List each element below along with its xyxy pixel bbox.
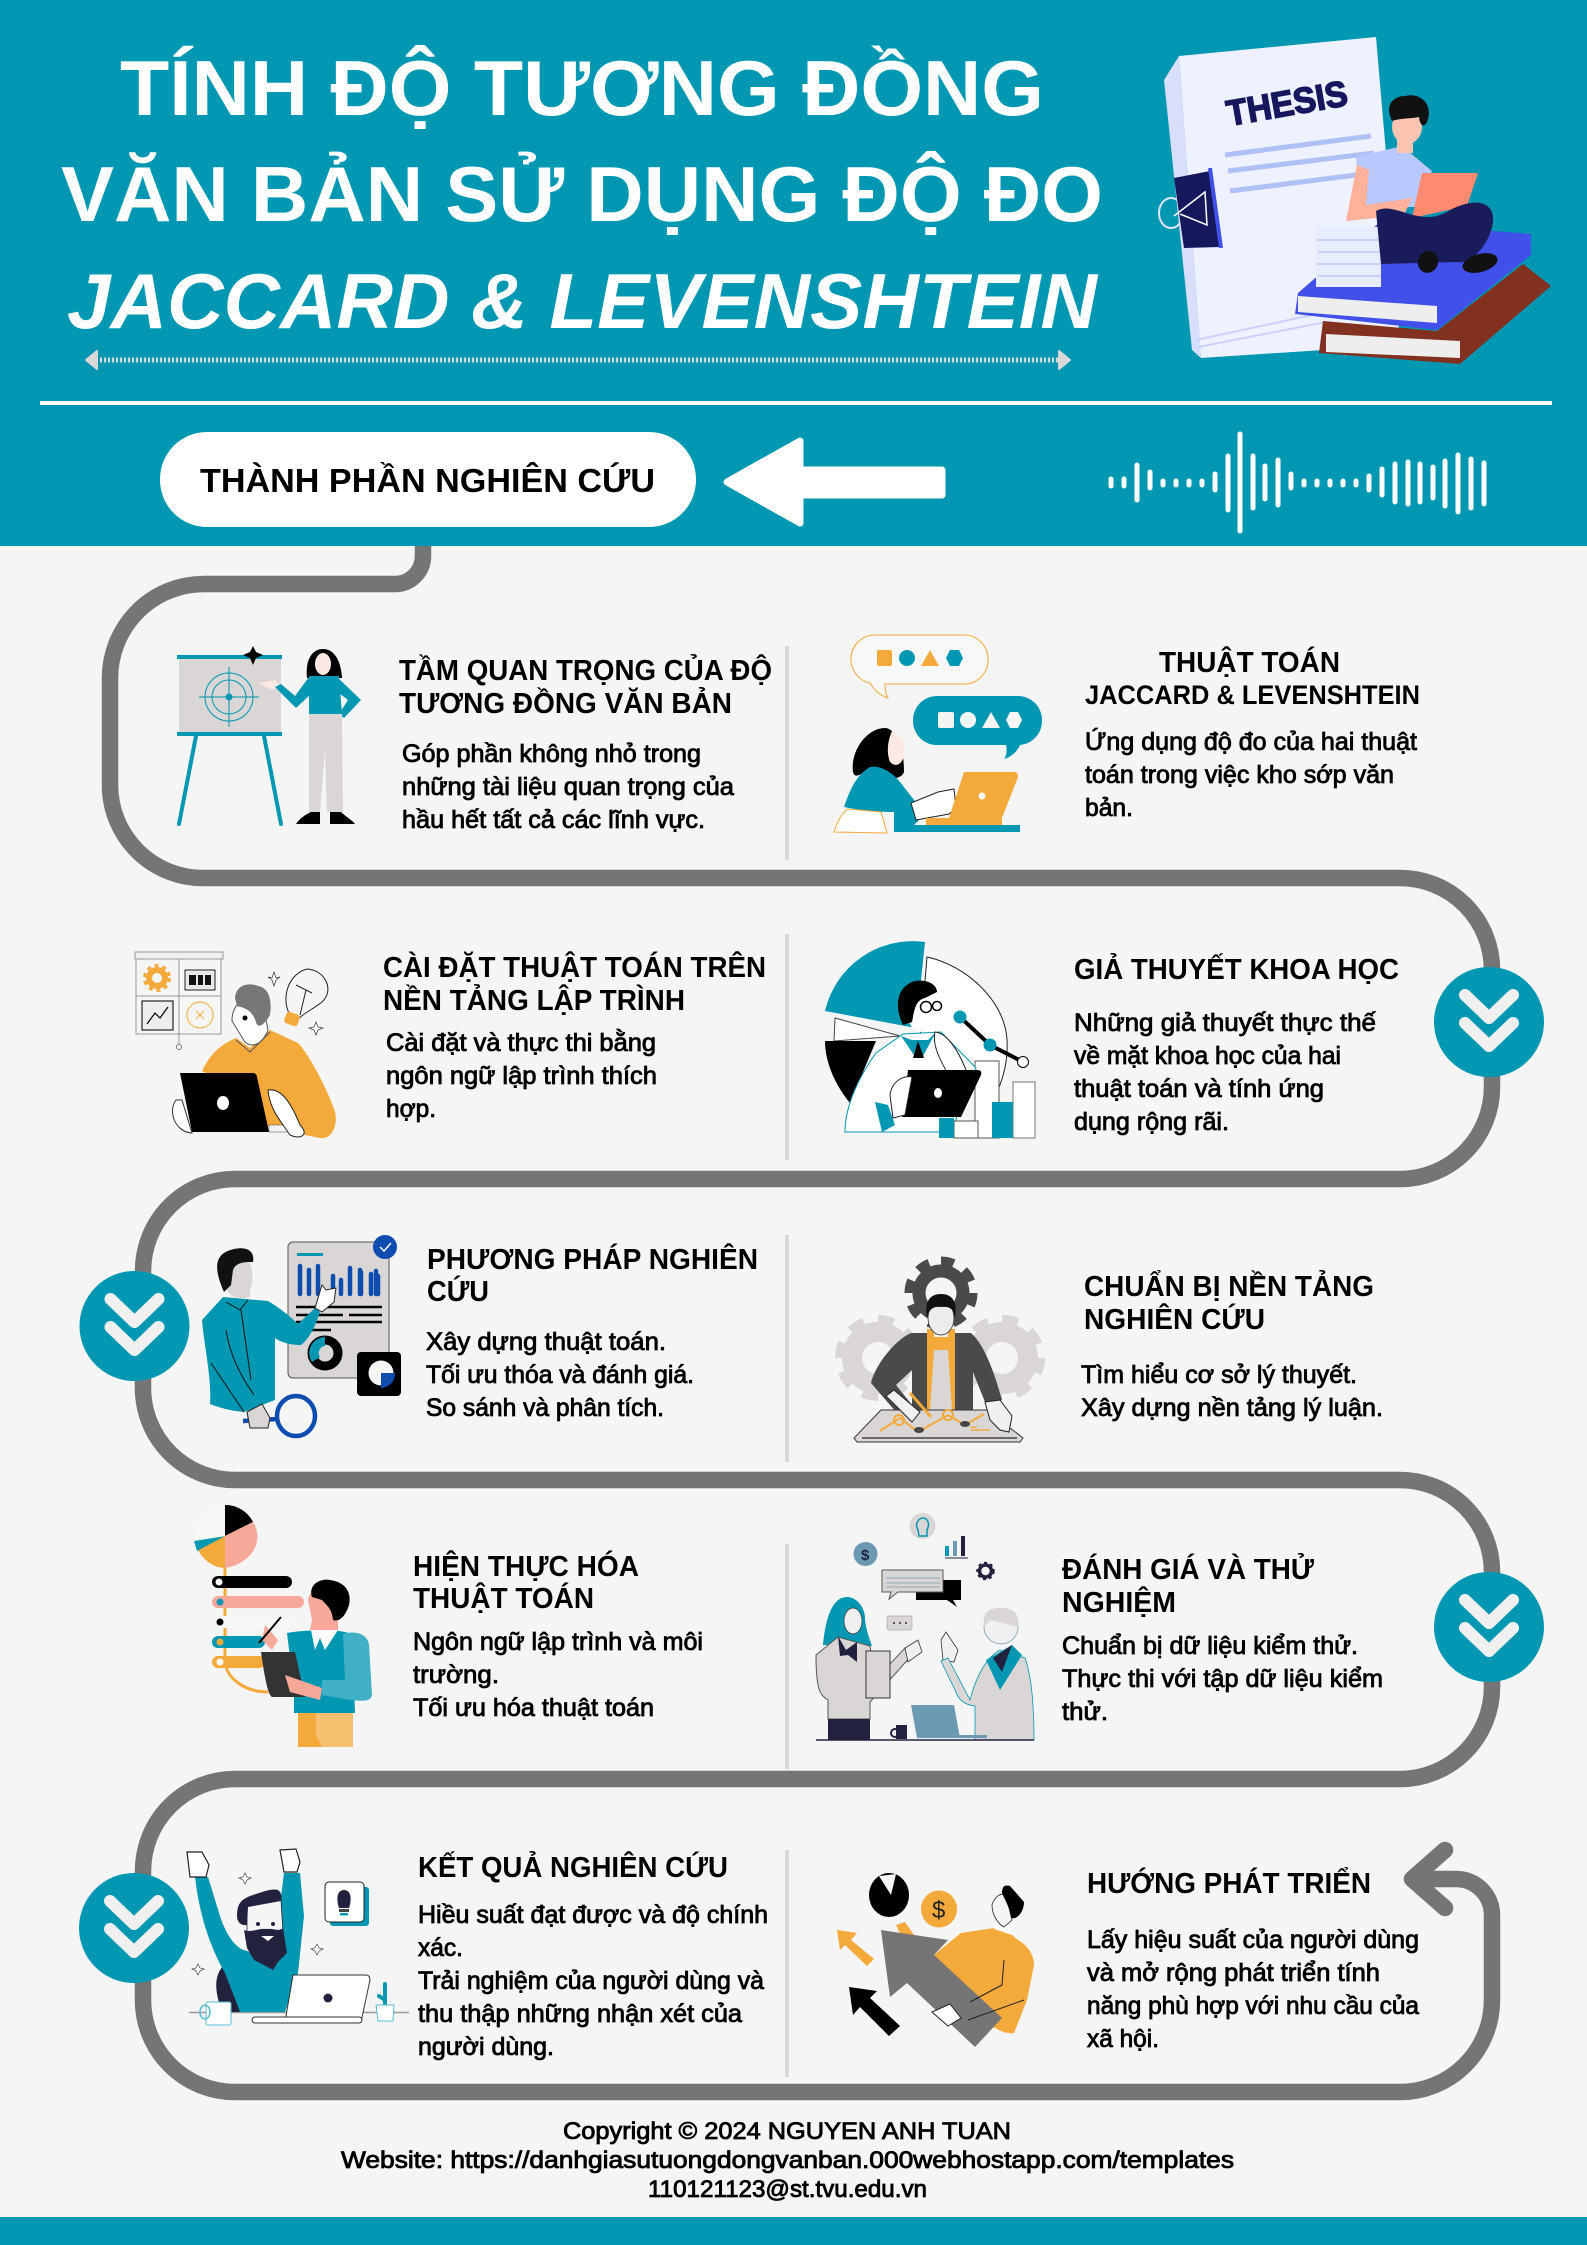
footer credits: 110121123@st.tvu.edu.vn [648,2176,927,2203]
body text: Lấy hiệu suất của người dùng [1087,1926,1419,1954]
heading: NGHIỆM [1062,1585,1176,1619]
title [61,44,1103,345]
body text: dụng rộng rãi. [1074,1108,1229,1136]
heading [399,653,772,720]
icon: man carrying arrow: $ [932,1897,945,1924]
body text: Ngôn ngữ lập trình và môi [413,1628,703,1656]
body text: hầu hết tất cả các lĩnh vực. [402,806,705,834]
icon: two people talking [816,1513,1034,1740]
heading: HIỆN THỰC HÓA [413,1549,639,1583]
heading: THUẬT TOÁN [413,1581,594,1615]
body text: Tìm hiểu cơ sở lý thuyết. [1081,1361,1357,1389]
body text: Tối ưu hóa thuật toán [413,1694,654,1722]
body text: Thực thi với tập dữ liệu kiểm [1062,1665,1383,1693]
body text [1081,1361,1383,1422]
body text: về mặt khoa học của hai [1074,1042,1341,1070]
heading: GIẢ THUYẾT KHOA HỌC [1074,952,1399,986]
heading: TẦM QUAN TRỌNG CỦA ĐỘ [399,653,772,687]
heading [427,1242,758,1308]
body text: So sánh và phân tích. [426,1394,664,1422]
body text: Cài đặt và thực thi bằng [386,1028,656,1057]
body text: bản. [1085,794,1133,822]
panel: header [0,0,1587,546]
panel: method [202,1235,758,1436]
footer credits: Copyright © 2024 NGUYEN ANH TUAN [563,2118,1011,2145]
dividers between columns [785,646,789,2077]
body text: người dùng. [418,2033,554,2061]
arrow [727,441,942,523]
icon: man with gears [839,1261,1041,1442]
body text: trường. [413,1661,499,1689]
body text: thử. [1062,1698,1108,1726]
heading: KẾT QUẢ NGHIÊN CỨU [418,1850,728,1884]
bottom bar [0,2217,1587,2245]
title: VĂN BẢN SỬ DỤNG ĐỘ ĐO [61,150,1103,238]
heading: CHUẨN BỊ NỀN TẢNG [1084,1269,1374,1303]
body text: Góp phần không nhỏ trong [402,740,701,768]
body text [1087,1926,1419,2053]
panel: evaluation [816,1513,1383,1740]
heading [1062,1552,1315,1619]
heading: JACCARD & LEVENSHTEIN [1085,680,1420,710]
body text [1062,1632,1383,1726]
icon: cheering man with laptop [187,1849,409,2025]
badge: chevrons row 3 [80,1271,190,1381]
body text: năng phù hợp với nhu cầu của [1087,1992,1419,2020]
panel: implementation [135,950,766,1138]
waveform [1111,434,1484,531]
body text [413,1628,703,1722]
heading: CỨU [427,1274,489,1308]
footer credits: Website: https://danhgiasutuongdongvanban.000webhostapp.com/templates [341,2147,1234,2174]
badge: chevrons row 2 [1434,967,1544,1077]
heading: NGHIÊN CỨU [1084,1302,1265,1336]
panel: hypothesis [825,941,1399,1138]
icon: two people talking: $ [861,1547,870,1564]
body text: Xây dựng nền tảng lý luận. [1081,1394,1383,1422]
winding road path [110,540,1492,2092]
heading [413,1549,639,1615]
body text: xã hội. [1087,2025,1159,2053]
panel: results [187,1849,768,2061]
body text: thu thập những nhận xét của [418,2000,742,2028]
body text: thuật toán và tính ứng [1074,1075,1324,1103]
body text: Tối ưu thóa và đánh giá. [426,1361,694,1389]
body text: Hiều suất đạt được và độ chính [418,1901,768,1929]
body text: và mở rộng phát triển tính [1087,1959,1380,1987]
heading: PHƯƠNG PHÁP NGHIÊN [427,1242,758,1276]
icon: man carrying arrow [837,1873,1034,2047]
body text [426,1328,694,1422]
body text: xác. [418,1934,463,1962]
icon: man with laptop, board and bulb [135,952,336,1138]
body text: những tài liệu quan trọng của [402,773,734,801]
footer credits [341,2118,1234,2203]
icon: man with chart list [194,1505,372,1747]
panel: algorithm [834,635,1420,833]
divider [40,401,1552,405]
illustration: thesis and student: THESIS [1223,72,1351,134]
panel: preparation [839,1261,1383,1442]
body text: Ứng dụng độ đo của hai thuật [1085,727,1417,756]
body text [418,1901,768,2061]
title: JACCARD & LEVENSHTEIN [67,257,1099,345]
body text: hợp. [386,1095,436,1123]
body text [1074,1009,1376,1136]
icon: man pointing at report [202,1235,401,1436]
dotted double arrow [86,351,1070,369]
body text: toán trong việc kho sớp văn [1085,761,1394,789]
panel: realization [194,1505,703,1747]
icon: woman with speech bubbles [834,635,1042,833]
body text: Xây dựng thuật toán. [426,1328,666,1356]
title: TÍNH ĐỘ TƯƠNG ĐỒNG [120,44,1044,132]
illustration: thesis and student [1159,37,1551,364]
heading: CÀI ĐẶT THUẬT TOÁN TRÊN [383,950,766,984]
heading: TƯƠNG ĐỒNG VĂN BẢN [399,686,732,720]
body text: Trải nghiệm của người dùng và [418,1967,764,1995]
heading [383,950,766,1017]
panel: future direction [837,1866,1419,2053]
body text: Chuẩn bị dữ liệu kiểm thử. [1062,1632,1358,1660]
pill label: THÀNH PHẦN NGHIÊN CỨU [200,462,655,499]
body text: Những giả thuyết thực thế [1074,1009,1376,1037]
pill label [160,432,696,527]
body text [402,740,734,834]
heading [1084,1269,1374,1336]
heading: THUẬT TOÁN [1159,645,1340,679]
heading [1085,645,1420,710]
panel: importance [177,646,772,834]
icon: scientist with pie chart [825,941,1035,1138]
heading: NỀN TẢNG LẬP TRÌNH [383,983,685,1017]
heading: HƯỚNG PHÁT TRIỂN [1087,1866,1371,1900]
body text: ngôn ngữ lập trình thích [386,1062,657,1090]
heading: ĐÁNH GIÁ VÀ THỬ [1062,1552,1315,1586]
badge: chevrons row 5 [79,1873,189,1983]
badge: chevrons row 4 [1434,1572,1544,1682]
body text [1085,727,1417,822]
body text [386,1028,657,1123]
icon: presenter at target board [177,646,361,824]
